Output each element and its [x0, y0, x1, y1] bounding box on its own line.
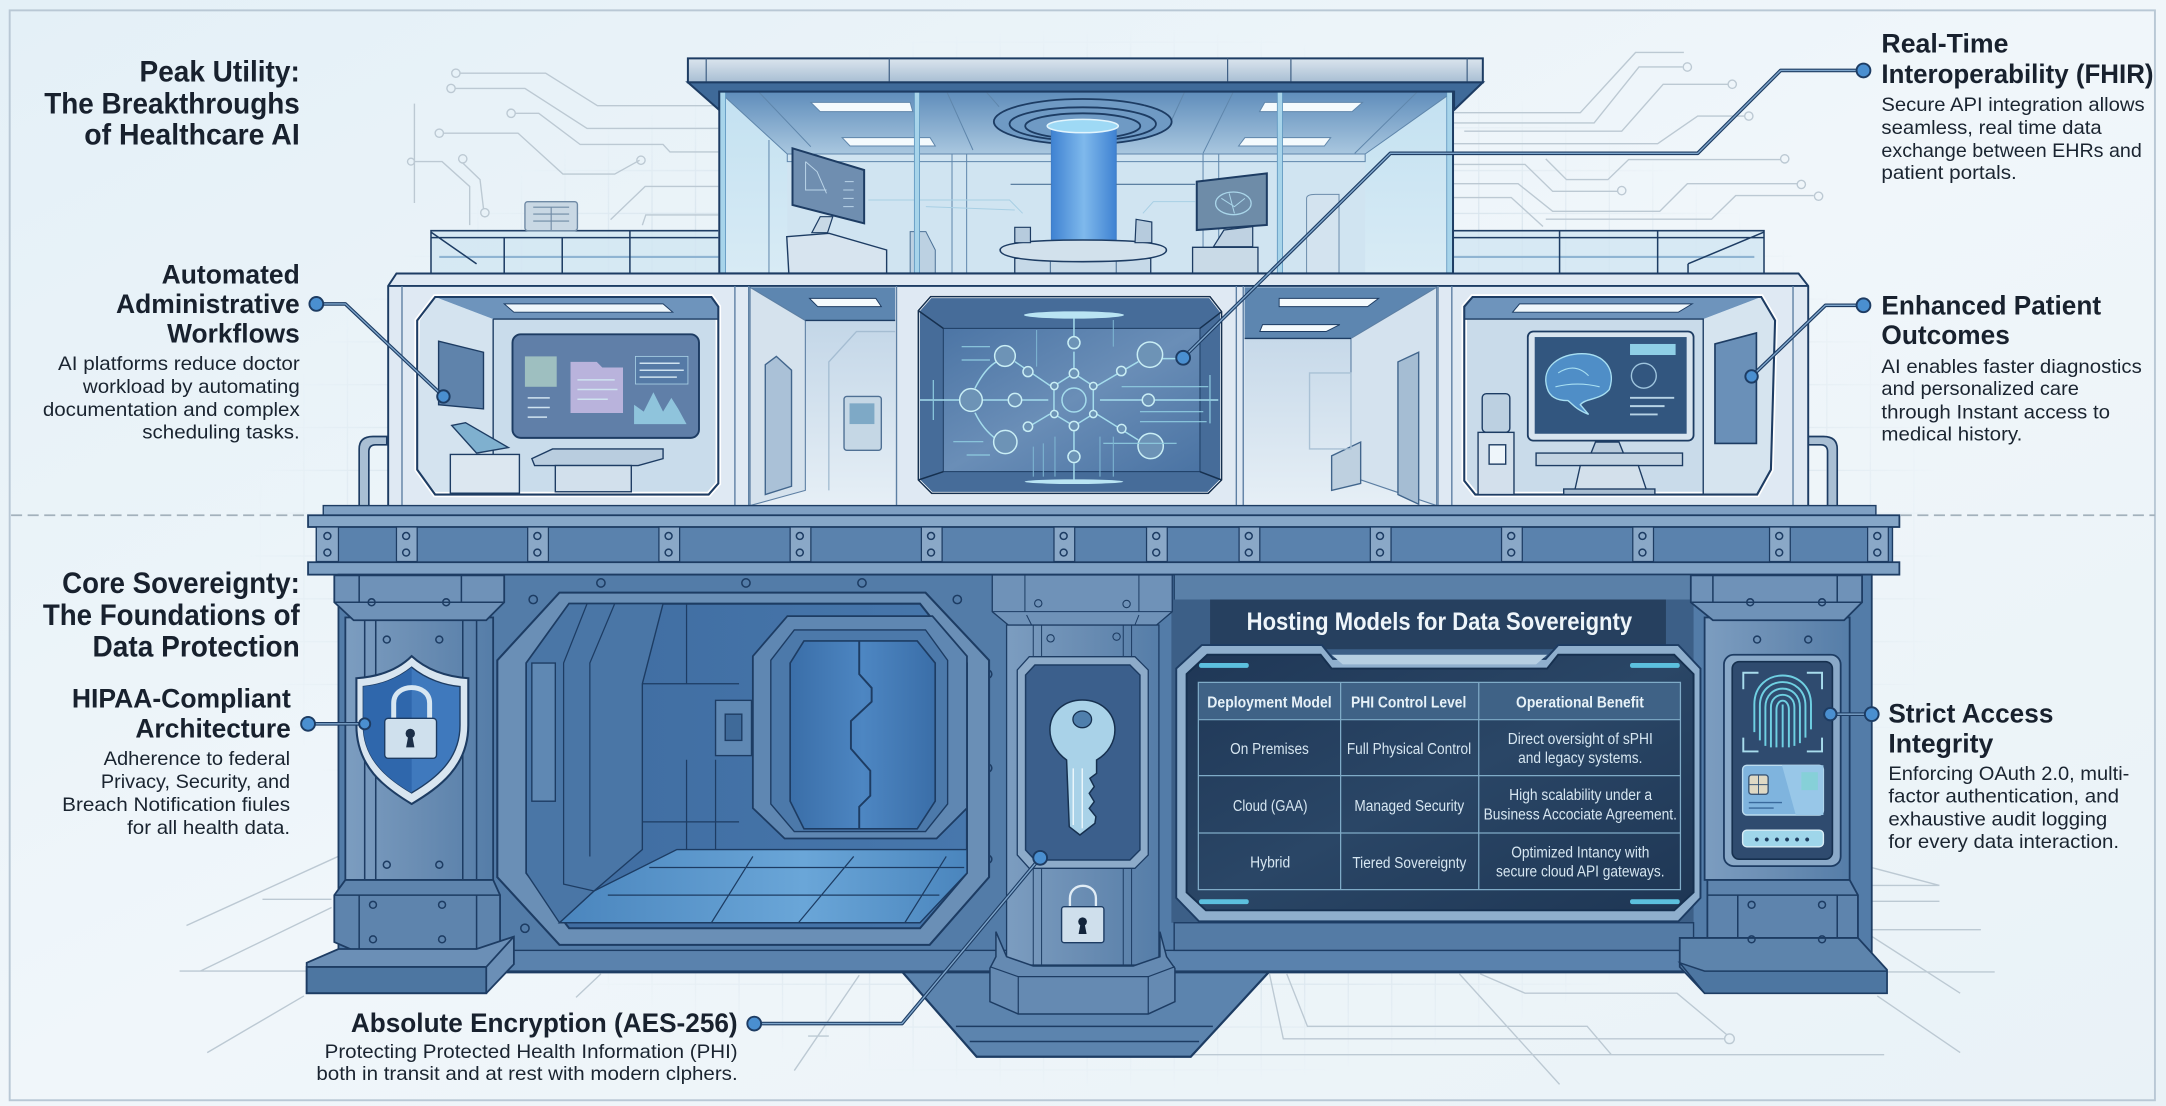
text: AES encryption: Protecting Protected Health Information (PHI) [325, 1041, 738, 1063]
wall terminal [1478, 394, 1514, 495]
text: access integrity: factor authentication, and [1888, 786, 2119, 808]
text: AES encryption: both in transit and at rest with modern clphers. [316, 1063, 738, 1085]
text: access integrity: Integrity [1888, 728, 1993, 758]
icon: PIN bar: •••••• [1754, 831, 1810, 847]
text: automated workflows: Administrative [116, 289, 300, 319]
text: AES encryption [316, 1008, 738, 1085]
callout connector: patient outcomes [1745, 298, 1870, 383]
screen: side vitals [1715, 333, 1756, 443]
room: patient outcomes [1464, 297, 1775, 495]
emitter lights [1024, 311, 1124, 484]
kiosk and desk [450, 423, 663, 493]
callout connector: automated workflows [309, 297, 450, 403]
text: patient outcomes: Outcomes [1881, 320, 2010, 350]
table: hosting models: High scalability under a [1509, 787, 1652, 804]
corridor: left [750, 287, 895, 506]
icon: fingerprint [1743, 673, 1822, 751]
text: FHIR: Real-Time [1881, 28, 2009, 58]
section heading: core sovereignty: Data Protection [93, 631, 300, 664]
text: HIPAA: Architecture [135, 714, 291, 744]
table: hosting models: Direct oversight of sPHI [1508, 731, 1653, 748]
pedestal [1000, 219, 1166, 273]
section heading: core sovereignty [43, 567, 300, 664]
icon: PIN bar [1743, 830, 1823, 847]
deck brackets [316, 527, 1888, 562]
rooftop vent [525, 202, 577, 231]
access device [1724, 655, 1841, 866]
text: access integrity: Enforcing OAuth 2.0, multi- [1888, 763, 2129, 785]
callout connector: FHIR [1176, 64, 1870, 365]
lower plinth [898, 967, 1274, 1057]
side balcony: right [1453, 231, 1764, 274]
screen: brain scan [1528, 332, 1694, 456]
table: hosting models: and legacy systems. [1518, 750, 1642, 767]
text: access integrity: Strict Access [1888, 698, 2053, 728]
pillar: left [307, 575, 514, 993]
side balcony: left [431, 202, 718, 274]
text: HIPAA: Privacy, Security, and [101, 771, 290, 793]
text: automated workflows: Workflows [167, 319, 300, 349]
table: hosting models: secure cloud API gateways. [1496, 864, 1665, 881]
light column [1011, 119, 1195, 240]
table: hosting models: Cloud (GAA) [1233, 798, 1307, 815]
table screen [1176, 645, 1700, 921]
table: hosting models: Business Accociate Agreement. [1484, 807, 1677, 824]
pipes [359, 437, 1837, 507]
table: hosting models: Full Physical Control [1347, 741, 1471, 758]
hosting panel backdrop [1171, 575, 1694, 950]
icon: key [1050, 700, 1115, 835]
screen: dashboard [512, 334, 699, 438]
pillar: center [990, 575, 1175, 1014]
section heading: peak utility: of Healthcare AI [84, 118, 300, 151]
text: FHIR [1881, 28, 2154, 184]
text: HIPAA [62, 684, 291, 839]
glass room: AI core [688, 58, 1483, 273]
table: hosting models: On Premises [1230, 741, 1309, 758]
node network [920, 318, 1218, 480]
table: hosting models: Optimized Intancy with [1511, 844, 1649, 861]
text: automated workflows: AI platforms reduce doctor [58, 353, 300, 375]
blueprint grid [320, 128, 1876, 1042]
monitor: right [1193, 173, 1267, 273]
icon: HIPAA shield [356, 656, 468, 804]
callout connector: HIPAA [301, 717, 370, 731]
chamber floor [559, 850, 967, 923]
divider: peak and core tiers [11, 514, 2155, 516]
table: hosting models: Operational Benefit [1516, 693, 1644, 711]
steel deck [308, 506, 1899, 575]
table: hosting models [1198, 682, 1680, 890]
text: automated workflows: Automated [162, 260, 300, 290]
section heading: peak utility: The Breakthroughs [44, 87, 300, 120]
room: network core [918, 297, 1222, 493]
callout connector: AES [747, 851, 1047, 1030]
medical desk [1536, 453, 1683, 495]
table title: Hosting Models for Data Sovereignty [1247, 608, 1632, 636]
door [753, 616, 967, 838]
section heading: peak utility: Peak Utility: [140, 56, 300, 89]
icon: padlock [1062, 886, 1104, 943]
table: hosting models: Tiered Sovereignty [1352, 855, 1466, 872]
monitor: left [787, 148, 935, 273]
section heading: core sovereignty: Core Sovereignty: [62, 567, 300, 600]
table: hosting models: Managed Security [1354, 798, 1464, 815]
text: FHIR: Secure API integration allows [1881, 94, 2145, 116]
ceiling ring [994, 99, 1172, 144]
text: automated workflows: documentation and complex [43, 399, 300, 421]
room: administrative workflows [417, 297, 718, 495]
section heading: core sovereignty: The Foundations of [43, 599, 300, 632]
text: automated workflows [43, 260, 300, 444]
text: HIPAA: Breach Notification fiules [62, 794, 290, 816]
text: automated workflows: scheduling tasks. [142, 422, 300, 444]
text: AES encryption: Absolute Encryption (AES-256) [351, 1008, 738, 1038]
pillar: right [1680, 575, 1887, 993]
roof slab [688, 58, 1483, 82]
text: patient outcomes [1881, 291, 2142, 446]
text: HIPAA: Adherence to federal [104, 748, 290, 770]
circuit traces [180, 52, 1995, 1084]
chamber side wall [526, 604, 663, 923]
screen: side panel [439, 341, 483, 409]
callout connector: access integrity [1824, 707, 1879, 721]
text: HIPAA: for all health data. [127, 817, 290, 839]
ceiling lights [811, 102, 1363, 146]
table: hosting models: Deployment Model [1207, 693, 1332, 711]
section heading: peak utility [44, 56, 300, 151]
ceiling [719, 92, 1453, 154]
vault chamber [497, 593, 989, 945]
text: patient outcomes: and personalized care [1881, 378, 2079, 400]
table: hosting models: Hybrid [1250, 854, 1290, 871]
middle floor [388, 274, 1808, 507]
text: FHIR: exchange between EHRs and [1881, 140, 2142, 162]
glass mullions [719, 92, 1453, 273]
corridor: right [1245, 287, 1437, 506]
text: access integrity: for every data interaction. [1888, 831, 2119, 853]
text: access integrity: exhaustive audit logging [1888, 809, 2107, 831]
text: patient outcomes: AI enables faster diagnostics [1881, 356, 2142, 378]
vault body [338, 575, 1872, 972]
text: patient outcomes: through Instant access to [1881, 402, 2110, 424]
text: FHIR: Interoperability (FHIR) [1881, 59, 2154, 89]
icon: ID card [1743, 765, 1823, 815]
text: automated workflows: workload by automating [82, 376, 300, 398]
text: patient outcomes: medical history. [1881, 424, 2022, 446]
text: access integrity [1888, 698, 2129, 853]
text: FHIR: seamless, real time data [1881, 117, 2102, 139]
text: FHIR: patient portals. [1881, 162, 2017, 184]
text: patient outcomes: Enhanced Patient [1881, 291, 2101, 321]
table: hosting models: PHI Control Level [1351, 693, 1466, 711]
text: HIPAA: HIPAA-Compliant [72, 684, 291, 714]
